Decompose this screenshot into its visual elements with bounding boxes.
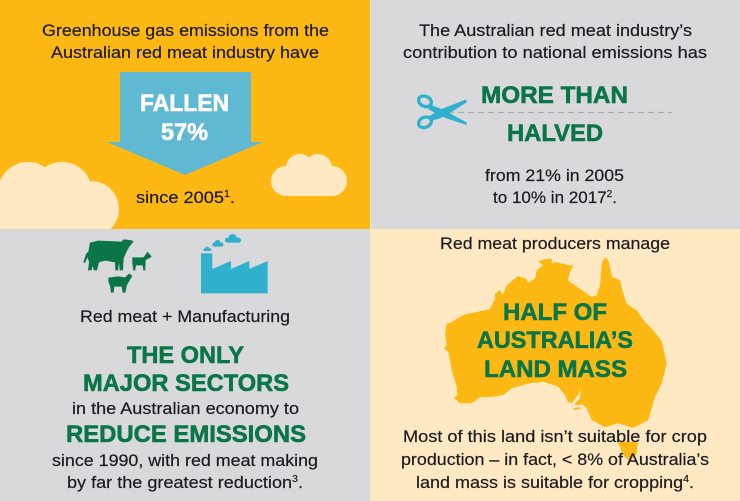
icon: cow, goat and sheep: [83, 239, 152, 293]
icon: scissors: [417, 94, 467, 130]
text: red meat + manufacturing: Red meat + Manufacturing: [80, 307, 290, 326]
arrow: fallen 57%: [107, 72, 263, 175]
heading: more than halved: HALVED: [507, 120, 603, 147]
map: Australia: [444, 257, 667, 462]
icon: small cloud: [271, 154, 347, 196]
text block: the only major sectors: THE ONLY: [127, 342, 244, 369]
text: from 21% to 10%: .: [612, 188, 617, 207]
text block: land suitability: production – in fact, < 8% of Australia’s: [401, 450, 709, 469]
intro text: contribution to national emissions: contribution to national emissions has: [403, 43, 707, 62]
text block: land suitability: [401, 427, 709, 492]
text block: the only major sectors: MAJOR SECTORS: [83, 370, 289, 397]
text block: the only major sectors: since 1990, with red meat making: [52, 451, 318, 470]
heading: half of Australia's land mass: LAND MASS: [484, 356, 627, 383]
heading: half of Australia's land mass: [477, 299, 633, 383]
text: from 21% to 10%: [485, 166, 624, 207]
intro text: greenhouse gas emissions: Greenhouse gas emissions from the: [42, 21, 329, 40]
text block: the only major sectors: by far the greatest reduction: [67, 473, 279, 492]
text: red meat producers manage: Red meat producers manage: [440, 234, 670, 253]
intro text: greenhouse gas emissions: Australian red meat industry have: [51, 43, 319, 62]
text block: the only major sectors: .: [298, 473, 303, 492]
heading: half of Australia's land mass: HALF OF: [503, 299, 607, 326]
panel: only major sectors: [0, 229, 370, 501]
panel: half of Australia's land mass: [370, 229, 740, 501]
intro text: greenhouse gas emissions: [42, 21, 329, 62]
text: since 2005: .: [230, 188, 235, 207]
intro text: contribution to national emissions: The Australian red meat industry’s: [419, 21, 692, 40]
text block: the only major sectors: REDUCE EMISSIONS: [66, 421, 306, 448]
text block: land suitability: land mass is suitable for cropping: [416, 473, 668, 492]
arrow: fallen 57%: 57%: [161, 119, 208, 146]
text: from 21% to 10%: from 21% in 2005: [485, 166, 624, 185]
text: from 21% to 10%: 2: [607, 189, 613, 200]
text block: land suitability: Most of this land isn’t suitable for crop: [403, 427, 707, 446]
panel: more than halved: [371, 0, 740, 229]
text block: the only major sectors: 3: [292, 474, 298, 485]
text block: the only major sectors: [52, 342, 318, 492]
text: since 2005: 1: [224, 189, 230, 200]
icon: large cloud: [0, 162, 119, 237]
panel: emissions fallen: [0, 0, 370, 237]
heading: half of Australia's land mass: AUSTRALIA’S: [477, 327, 633, 354]
text block: the only major sectors: in the Australian economy to: [72, 399, 299, 418]
arrow: fallen 57%: FALLEN: [140, 90, 229, 117]
text block: land suitability: .: [689, 473, 694, 492]
heading: more than halved: [448, 82, 672, 147]
heading: more than halved: MORE THAN: [481, 82, 628, 109]
text block: land suitability: 4: [683, 474, 689, 485]
text: since 2005: since 2005: [136, 188, 218, 207]
intro text: contribution to national emissions: [403, 21, 707, 62]
text: from 21% to 10%: to 10% in 2017: [493, 188, 606, 207]
icon: factory with clouds: [201, 234, 268, 293]
